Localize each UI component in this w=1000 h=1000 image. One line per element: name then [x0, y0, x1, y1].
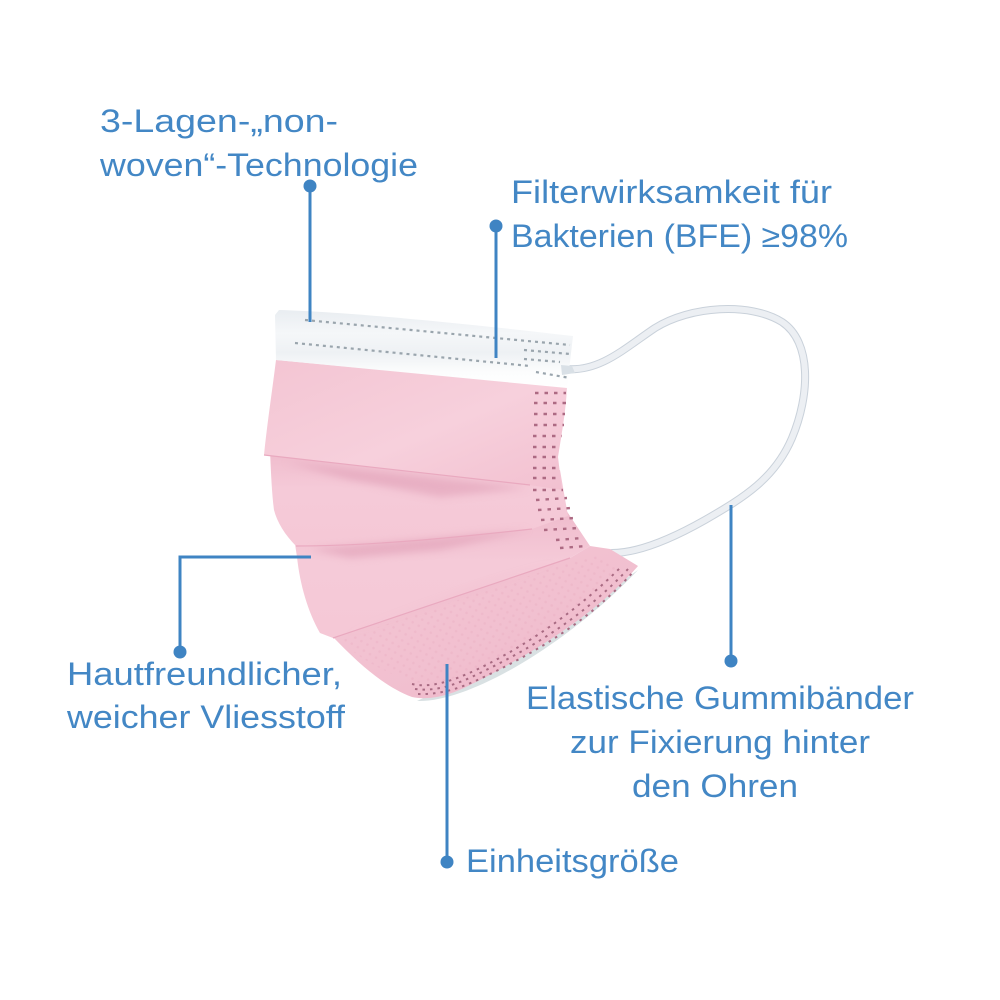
label text: Elastische Gummibänder: [526, 680, 914, 716]
connector dot: [440, 856, 454, 868]
connector dot: [724, 654, 738, 668]
top pleat: [264, 360, 567, 490]
label text: zur Fixierung hinter: [570, 724, 870, 760]
label text: Bakterien (BFE) ≥98%: [511, 218, 848, 254]
callout: bacterial filtration: [490, 174, 848, 358]
label text: Einheitsgröße: [466, 843, 679, 879]
lower pleat texture: [340, 555, 625, 683]
callout: elastic bands: [526, 505, 914, 804]
label text: weicher Vliesstoff: [66, 699, 345, 735]
side perforations: [533, 393, 587, 548]
ear loop: [566, 309, 805, 553]
callout: skin friendly fleece: [66, 557, 345, 735]
connector dot: [490, 220, 502, 232]
connector dot: [304, 180, 316, 192]
callout: one size: [440, 664, 679, 879]
connector line: [446, 664, 448, 862]
third pleat: [295, 510, 590, 638]
connector line: [180, 557, 311, 652]
callout: 3-layer technology: [99, 103, 418, 322]
label text: 3-Lagen-„non-: [100, 103, 338, 139]
connector dot: [174, 646, 186, 658]
second pleat: [270, 450, 568, 546]
pleat edge highlights: [264, 455, 570, 638]
loop attachment: [561, 365, 575, 375]
connector line: [494, 226, 498, 358]
label text: den Ohren: [632, 768, 798, 804]
white nose band: [275, 310, 573, 388]
illustration: pink face mask: [264, 309, 805, 701]
band perforations: [295, 320, 570, 378]
mask bottom edge white lining: [417, 570, 638, 701]
connector line: [730, 505, 732, 661]
lower pleat perforations: [412, 566, 633, 694]
label text: woven“-Technologie: [99, 147, 418, 183]
connector line: [308, 186, 312, 322]
fold shadows: [285, 462, 560, 636]
label text: Hautfreundlicher,: [67, 656, 342, 692]
label text: Filterwirksamkeit für: [511, 174, 832, 210]
lower pleat: [333, 546, 638, 698]
